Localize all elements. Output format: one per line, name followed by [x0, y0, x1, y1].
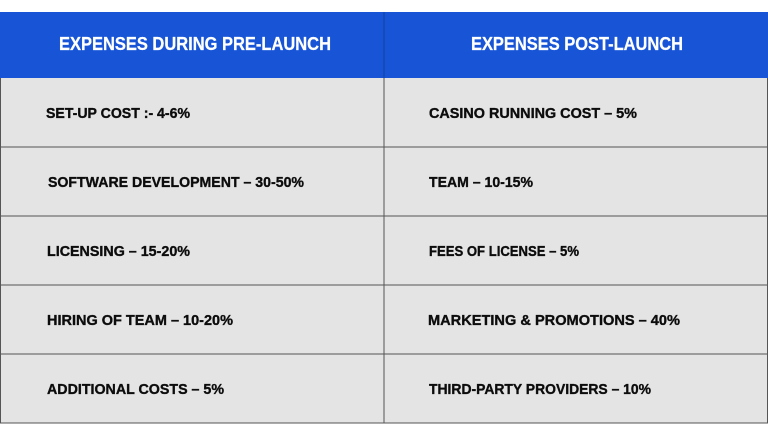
- post-launch: team: TEAM – 10-15%: [429, 175, 533, 191]
- pre-launch: hiring of team: HIRING OF TEAM – 10-20%: [47, 313, 233, 329]
- post-launch: casino running cost: CASINO RUNNING COST – 5%: [429, 106, 637, 122]
- pre-launch: licensing: LICENSING – 15-20%: [47, 244, 190, 260]
- pre-launch: software development: SOFTWARE DEVELOPMENT – 30-50%: [48, 175, 304, 191]
- header band: [0, 12, 768, 78]
- pre-launch: set-up cost: SET-UP COST :- 4-6%: [46, 106, 190, 122]
- pre-launch: additional costs: ADDITIONAL COSTS – 5%: [47, 382, 224, 398]
- post-launch: third-party providers: THIRD-PARTY PROVIDERS – 10%: [429, 382, 651, 398]
- heading: pre-launch: EXPENSES DURING PRE-LAUNCH: [59, 34, 331, 54]
- post-launch: fees of license: FEES OF LICENSE – 5%: [429, 244, 579, 260]
- post-launch: marketing and promotions: MARKETING & PROMOTIONS – 40%: [428, 313, 680, 329]
- heading: post-launch: EXPENSES POST-LAUNCH: [471, 34, 683, 54]
- panel: table body background: [0, 78, 768, 424]
